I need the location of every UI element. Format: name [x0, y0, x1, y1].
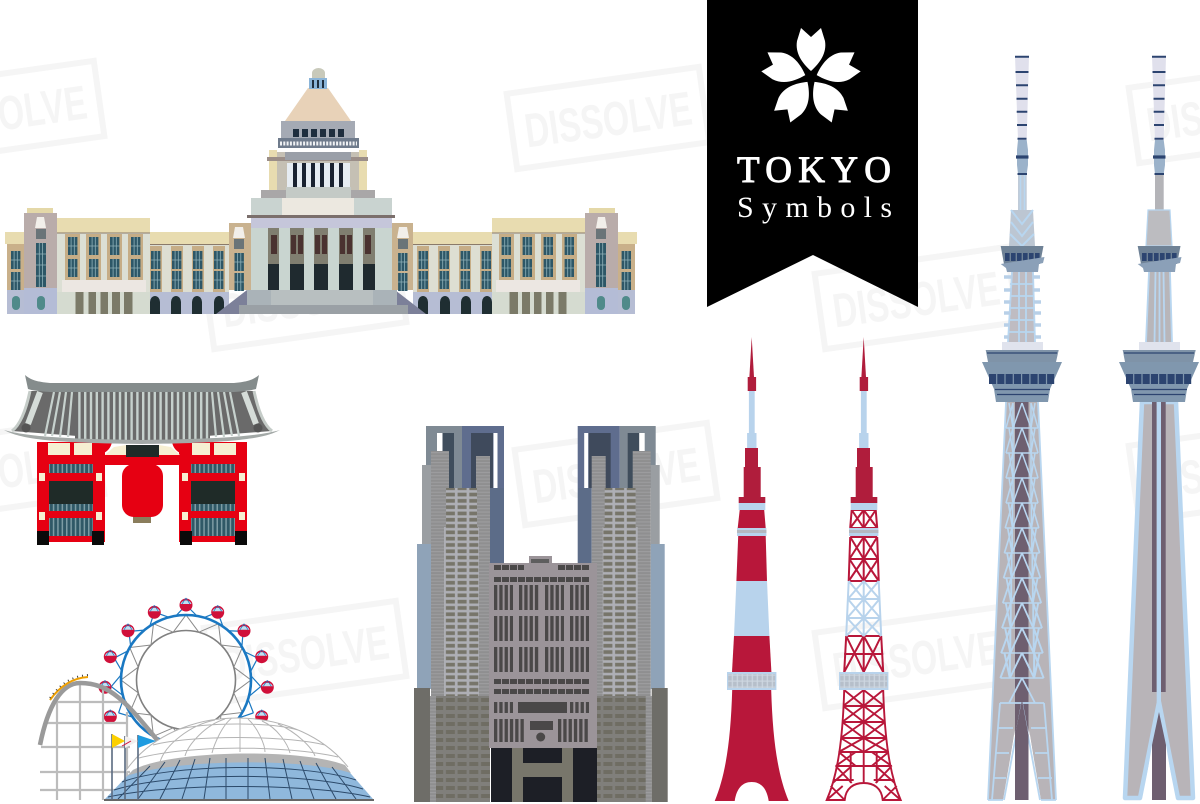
- solid tower upper: [727, 337, 776, 690]
- panel: Tokyo Metropolitan Government Building: [414, 426, 668, 802]
- left tower: [414, 426, 504, 802]
- sakura icon: [760, 28, 862, 125]
- solid observatories and antenna: [1119, 56, 1199, 402]
- panel: Skytree solid: [1119, 56, 1199, 800]
- right wing of the Diet building: [391, 208, 637, 314]
- gate pillars right: [172, 442, 247, 545]
- dome: [261, 68, 375, 198]
- lattice mid shafts: [1004, 175, 1041, 342]
- panel: Kaminarimon gate: [4, 375, 280, 545]
- title TOKYO: TOKYO: [737, 150, 891, 191]
- lattice tower upper: [839, 337, 888, 690]
- flags: [112, 734, 156, 800]
- left wing of the Diet building: [5, 208, 251, 314]
- panel: amusement park: [40, 598, 374, 801]
- dome stadium: [104, 718, 374, 801]
- solid tower body: [715, 510, 789, 801]
- roller coaster: [40, 675, 158, 800]
- lattice lower shaft: [988, 402, 1056, 800]
- lattice observatories and antenna: [982, 56, 1062, 402]
- gate pillars left: [37, 442, 112, 545]
- lattice body: [827, 510, 901, 800]
- panel: Tokyo Tower solid: [715, 337, 789, 801]
- banner: [707, 0, 918, 307]
- central portico: [239, 198, 408, 314]
- panel: Skytree lattice: [982, 56, 1062, 800]
- red lantern: [122, 464, 163, 523]
- right tower: [578, 426, 668, 802]
- solid lower shaft: [1125, 402, 1193, 800]
- central block: [489, 556, 597, 802]
- ferris wheel: [98, 598, 274, 745]
- panel: National Diet Building: [5, 68, 637, 314]
- gate lintel: [105, 445, 180, 465]
- solid mid shafts: [1146, 175, 1172, 342]
- subtitle Symbols: Symbols: [737, 191, 892, 224]
- temple roof: [4, 375, 280, 444]
- panel: Tokyo Tower lattice: [827, 337, 901, 800]
